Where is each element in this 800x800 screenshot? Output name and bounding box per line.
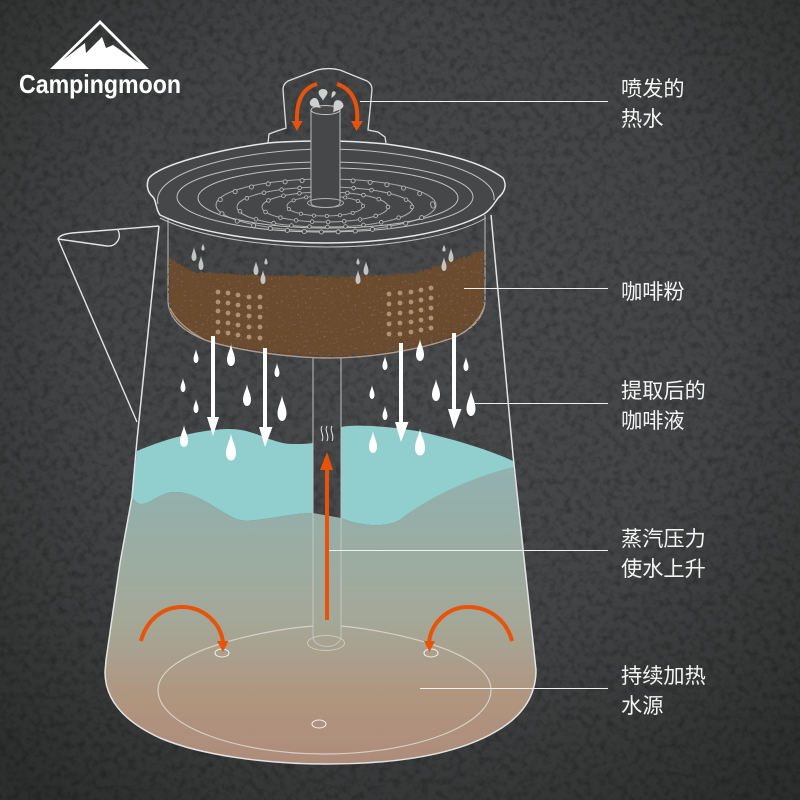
teal coffee liquid surface — [132, 426, 514, 525]
base holes — [215, 649, 438, 728]
label: heat source: 水源 — [621, 694, 663, 718]
label: coffee grounds: 咖啡粉 — [621, 280, 685, 304]
basket holes left — [216, 290, 262, 340]
label: brewed coffee: 提取后的 — [621, 379, 706, 403]
base disc — [158, 626, 491, 754]
lid outer rim — [147, 141, 505, 243]
label: heat source — [621, 664, 706, 718]
leader lines — [329, 102, 608, 688]
label: hot water — [621, 77, 685, 131]
label: heat source: 持续加热 — [621, 664, 706, 688]
coffee basket with grounds — [168, 215, 485, 358]
water body gradient — [105, 462, 536, 764]
pot glass outline — [105, 215, 536, 764]
white downward arrows — [207, 333, 462, 447]
orange arrow: steam rising — [320, 452, 333, 620]
orange arrows: top circulation — [292, 84, 363, 131]
lid with knob — [147, 68, 505, 247]
label: brewed coffee: 咖啡液 — [621, 409, 685, 433]
lid inner rings — [158, 149, 494, 247]
hot water splash drops — [308, 89, 345, 116]
label: brewed coffee — [621, 379, 706, 433]
gray water drops on grounds — [192, 244, 454, 284]
label: steam pressure: 蒸汽压力 — [621, 527, 706, 551]
coffee pot illustration — [58, 215, 536, 764]
lid perforation rings — [217, 180, 433, 232]
label: hot water: 热水 — [621, 107, 663, 131]
white coffee drops — [180, 339, 476, 460]
steam squiggles — [321, 426, 333, 441]
basket holes right — [387, 286, 433, 336]
centre tube lines — [313, 357, 341, 646]
pot spout — [58, 226, 159, 422]
logo: Campingmoon: Campingmoon — [19, 69, 181, 99]
label: steam pressure: 使水上升 — [621, 557, 706, 581]
label: steam pressure — [621, 527, 706, 581]
label: hot water: 喷发的 — [621, 77, 685, 101]
knob outline — [268, 68, 386, 143]
lid centre tube — [311, 110, 340, 208]
logo: Campingmoon — [19, 20, 181, 99]
orange arrows: base circulation — [141, 607, 512, 652]
